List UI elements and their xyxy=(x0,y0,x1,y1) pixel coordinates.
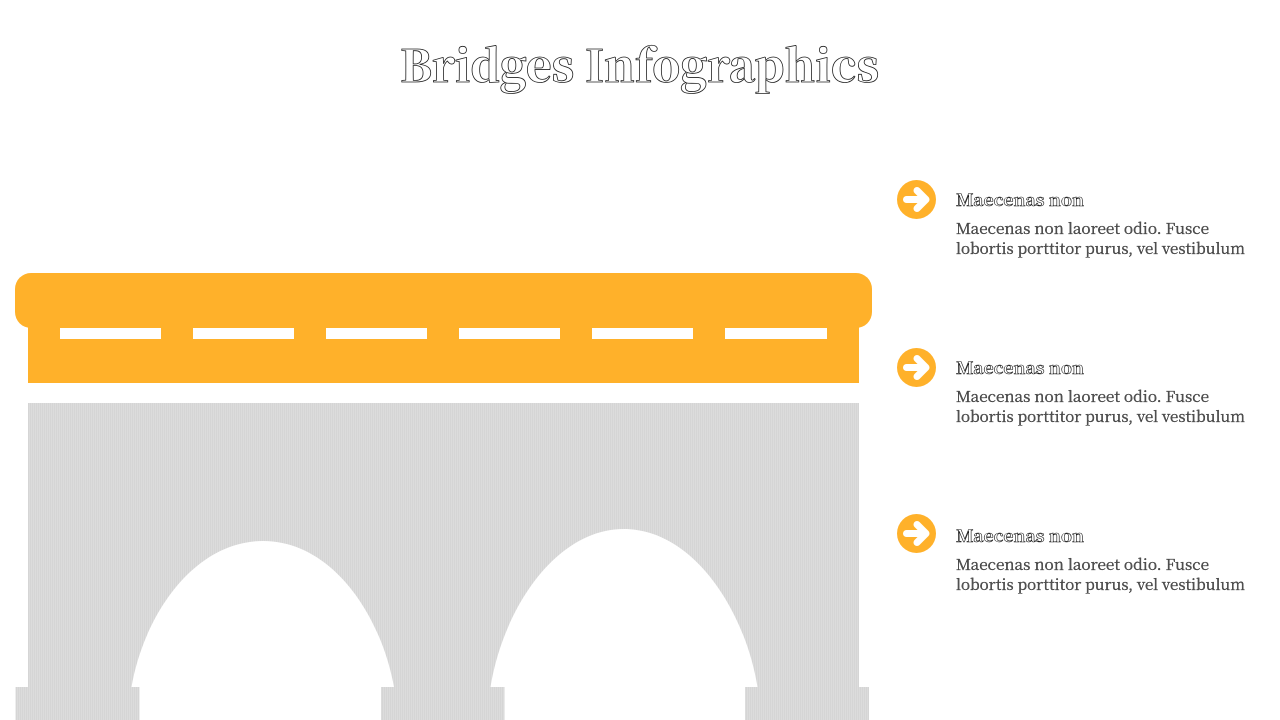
title: Bridges Infographics xyxy=(400,31,879,95)
item text: Maecenas non laoreet odio. Fusce xyxy=(956,386,1209,407)
road dashes xyxy=(60,328,827,339)
item text: lobortis porttitor purus, vel vestibulum xyxy=(956,574,1245,595)
item heading: Maecenas non xyxy=(956,354,1084,379)
item 1 xyxy=(897,180,1245,259)
item text xyxy=(956,554,1245,595)
item text xyxy=(956,386,1245,427)
item text xyxy=(956,218,1245,259)
item text: Maecenas non laoreet odio. Fusce xyxy=(956,554,1209,575)
item 2 xyxy=(897,348,1245,427)
item text: lobortis porttitor purus, vel vestibulum xyxy=(956,238,1245,259)
bridge body with arches xyxy=(16,403,869,720)
item 3 xyxy=(897,514,1245,595)
bridge deck xyxy=(15,273,872,383)
icon: arrow circle xyxy=(897,348,936,387)
item heading: Maecenas non xyxy=(956,186,1084,211)
icon: arrow circle xyxy=(897,514,936,553)
item text: Maecenas non laoreet odio. Fusce xyxy=(956,218,1209,239)
item text: lobortis porttitor purus, vel vestibulum xyxy=(956,406,1245,427)
bridge illustration xyxy=(15,273,872,720)
item heading: Maecenas non xyxy=(956,522,1084,547)
icon: arrow circle xyxy=(897,180,936,219)
